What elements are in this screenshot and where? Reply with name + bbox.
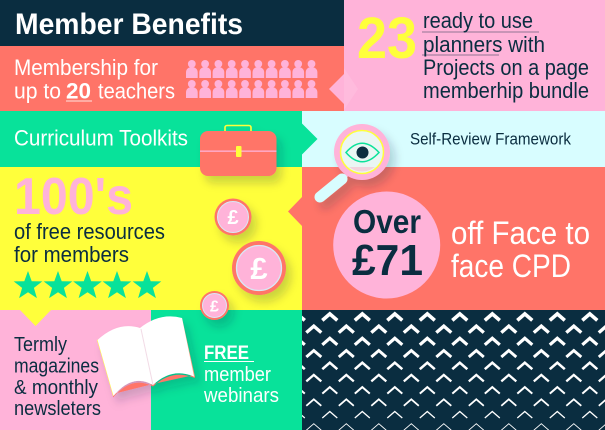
panel: curriculum toolkits (0, 111, 302, 167)
text: membership for up to 20 teachers: 20 (66, 78, 91, 104)
badge: over 71 pounds (333, 192, 440, 298)
pattern panel: chevrons (274, 310, 605, 430)
text: membership for up to 20 teachers: Membership for (14, 55, 158, 80)
badge: over 71 pounds: £71 (352, 236, 423, 285)
badge: over 71 pounds: Over (353, 203, 421, 240)
text: off face to face CPD (451, 215, 590, 284)
panel: free webinars (151, 310, 302, 430)
panel: membership for 20 teachers (0, 46, 344, 111)
text: termly magazines and monthly newsletters: & monthly (14, 376, 99, 399)
icon: open book (97, 316, 195, 398)
icon: rows of 20 people (186, 60, 317, 98)
text: curriculum toolkits: Curriculum Toolkits (14, 126, 188, 150)
text: of free resources for members: for members (14, 242, 129, 267)
text: termly magazines and monthly newsletters (14, 333, 101, 420)
text: ready to use planners: planners with (423, 32, 545, 57)
icon: large pound coin (232, 241, 286, 295)
big number 23: 23 (357, 6, 417, 71)
icon: tiny pound coin: £ (210, 298, 219, 316)
panel: 23 planners (329, 0, 605, 111)
text: free member webinars: webinars (203, 384, 279, 407)
text: free member webinars (203, 343, 279, 407)
text: ready to use planners: ready to use (423, 8, 533, 33)
panel: self-review framework (302, 111, 605, 167)
text: ready to use planners: memberhip bundle (423, 78, 589, 103)
panel: free resources (0, 167, 302, 310)
panel: termly magazines (0, 310, 151, 430)
text: ready to use planners: Projects on a page (423, 55, 589, 80)
icon: briefcase (200, 126, 276, 176)
icon: tiny pound coin (200, 291, 229, 320)
text: self-review framework: Self-Review Framework (410, 130, 572, 148)
text: ready to use planners (422, 8, 589, 103)
icon: five stars (14, 271, 161, 298)
panel: face to face CPD (288, 167, 605, 310)
heading: Member Benefits: Member Benefits (15, 8, 243, 41)
text: membership for up to 20 teachers: up to (14, 78, 61, 104)
icon: small pound coin: £ (227, 207, 239, 229)
text: membership for up to 20 teachers (14, 55, 175, 104)
text: off face to face CPD: face CPD (451, 248, 571, 284)
text: free member webinars: member (204, 363, 271, 386)
text: of free resources for members: of free resources (14, 219, 165, 244)
icon: magnifying glass with eye (320, 124, 390, 197)
text: off face to face CPD: off Face to (451, 215, 590, 251)
panel: title band (0, 0, 344, 46)
icon: large pound coin: £ (250, 251, 268, 286)
big text: 100's: 100's (14, 168, 133, 226)
text: termly magazines and monthly newsletters: newsleters (14, 397, 101, 420)
icon: small pound coin (214, 198, 252, 236)
text: free member webinars: FREE (204, 343, 249, 364)
text: of free resources for members (14, 219, 165, 267)
text: membership for up to 20 teachers: teachers (98, 78, 175, 104)
text: termly magazines and monthly newsletters: magazines (14, 354, 99, 378)
text: termly magazines and monthly newsletters: Termly (14, 333, 68, 356)
